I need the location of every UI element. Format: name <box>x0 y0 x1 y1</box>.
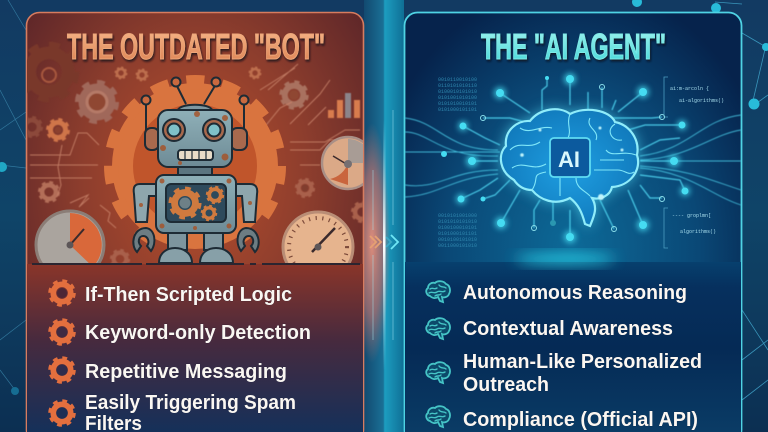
robot legs <box>159 233 233 263</box>
floor glow <box>515 254 615 264</box>
item: spam: Easily Triggering Spam <box>85 392 296 414</box>
binary text: 0101010101010 <box>438 219 477 225</box>
network decoration: left <box>0 0 26 395</box>
large orange gear <box>111 82 279 250</box>
binary text: 0101010010101 <box>438 101 477 107</box>
item: repetitive: Repetitive Messaging <box>85 361 287 383</box>
title: outdated bot: THE OUTDATED "BOT" <box>67 26 325 67</box>
binary text: 0101001010100 <box>438 95 477 101</box>
item: human-like: Outreach <box>463 374 549 396</box>
code snippets: algorithms() <box>680 229 716 235</box>
icon: robot <box>133 78 259 263</box>
network decoration: right <box>632 0 768 400</box>
icon: ai chip: AI <box>558 147 580 172</box>
item: human-like: Human-Like Personalized <box>463 351 702 373</box>
item: spam <box>50 392 296 432</box>
code snippets: ---- groplmn[ <box>672 213 711 219</box>
list background <box>27 264 363 432</box>
list: ai agent features <box>426 281 702 431</box>
item: compliance: Compliance (Official API) <box>463 409 698 431</box>
item: if-then: If-Then Scripted Logic <box>85 284 292 306</box>
rust spots <box>139 111 252 230</box>
robot eyes <box>163 119 225 141</box>
code snippets <box>664 77 724 248</box>
panel: outdated bot <box>23 12 374 432</box>
icon: glowing brain <box>501 109 638 226</box>
robot body <box>156 175 236 233</box>
list: outdated bot features <box>50 281 311 432</box>
robot mouth <box>178 150 213 160</box>
binary text: 0101000101101 <box>438 231 477 237</box>
circuit nodes <box>441 73 690 243</box>
item: autonomous: Autonomous Reasoning <box>463 282 687 304</box>
arrow: chevrons between panels <box>370 235 398 249</box>
item: contextual: Contextual Awareness <box>463 318 673 340</box>
robot arms <box>133 184 259 252</box>
binary text: 0100100010101 <box>438 225 477 231</box>
title: ai agent: THE "AI AGENT" <box>481 26 666 67</box>
binary text: 0110101010110 <box>438 83 477 89</box>
gauge: upper right <box>320 136 363 190</box>
circuit traces <box>405 78 741 237</box>
panel: ai agent <box>404 12 742 432</box>
item: keyword: Keyword-only Detection <box>85 322 311 344</box>
icon: ai chip <box>550 138 590 177</box>
item: human-like <box>426 351 702 396</box>
floor line <box>32 263 360 265</box>
antennae <box>142 78 248 130</box>
code snippets: ai:m-arcoln { <box>670 86 709 92</box>
binary text: 0010101001000 <box>438 213 477 219</box>
gauge: left <box>34 210 106 263</box>
binary text: 0011000101010 <box>438 243 477 249</box>
binary text: 0101000101101 <box>438 107 477 113</box>
binary text: 0010100101010 <box>438 237 477 243</box>
list background <box>405 262 741 432</box>
bars <box>328 110 334 118</box>
robot chest panel <box>166 184 226 222</box>
robot neck <box>177 168 213 174</box>
robot dome and ears <box>145 105 247 150</box>
code snippets: ai-algorithms() <box>679 98 724 104</box>
robot head <box>158 110 232 167</box>
gauge: bottom right <box>282 210 354 263</box>
background machinery <box>23 46 371 268</box>
binary text: 0010110010100 <box>438 77 477 83</box>
binary text: 0100010101010 <box>438 89 477 95</box>
binary text <box>438 77 477 249</box>
